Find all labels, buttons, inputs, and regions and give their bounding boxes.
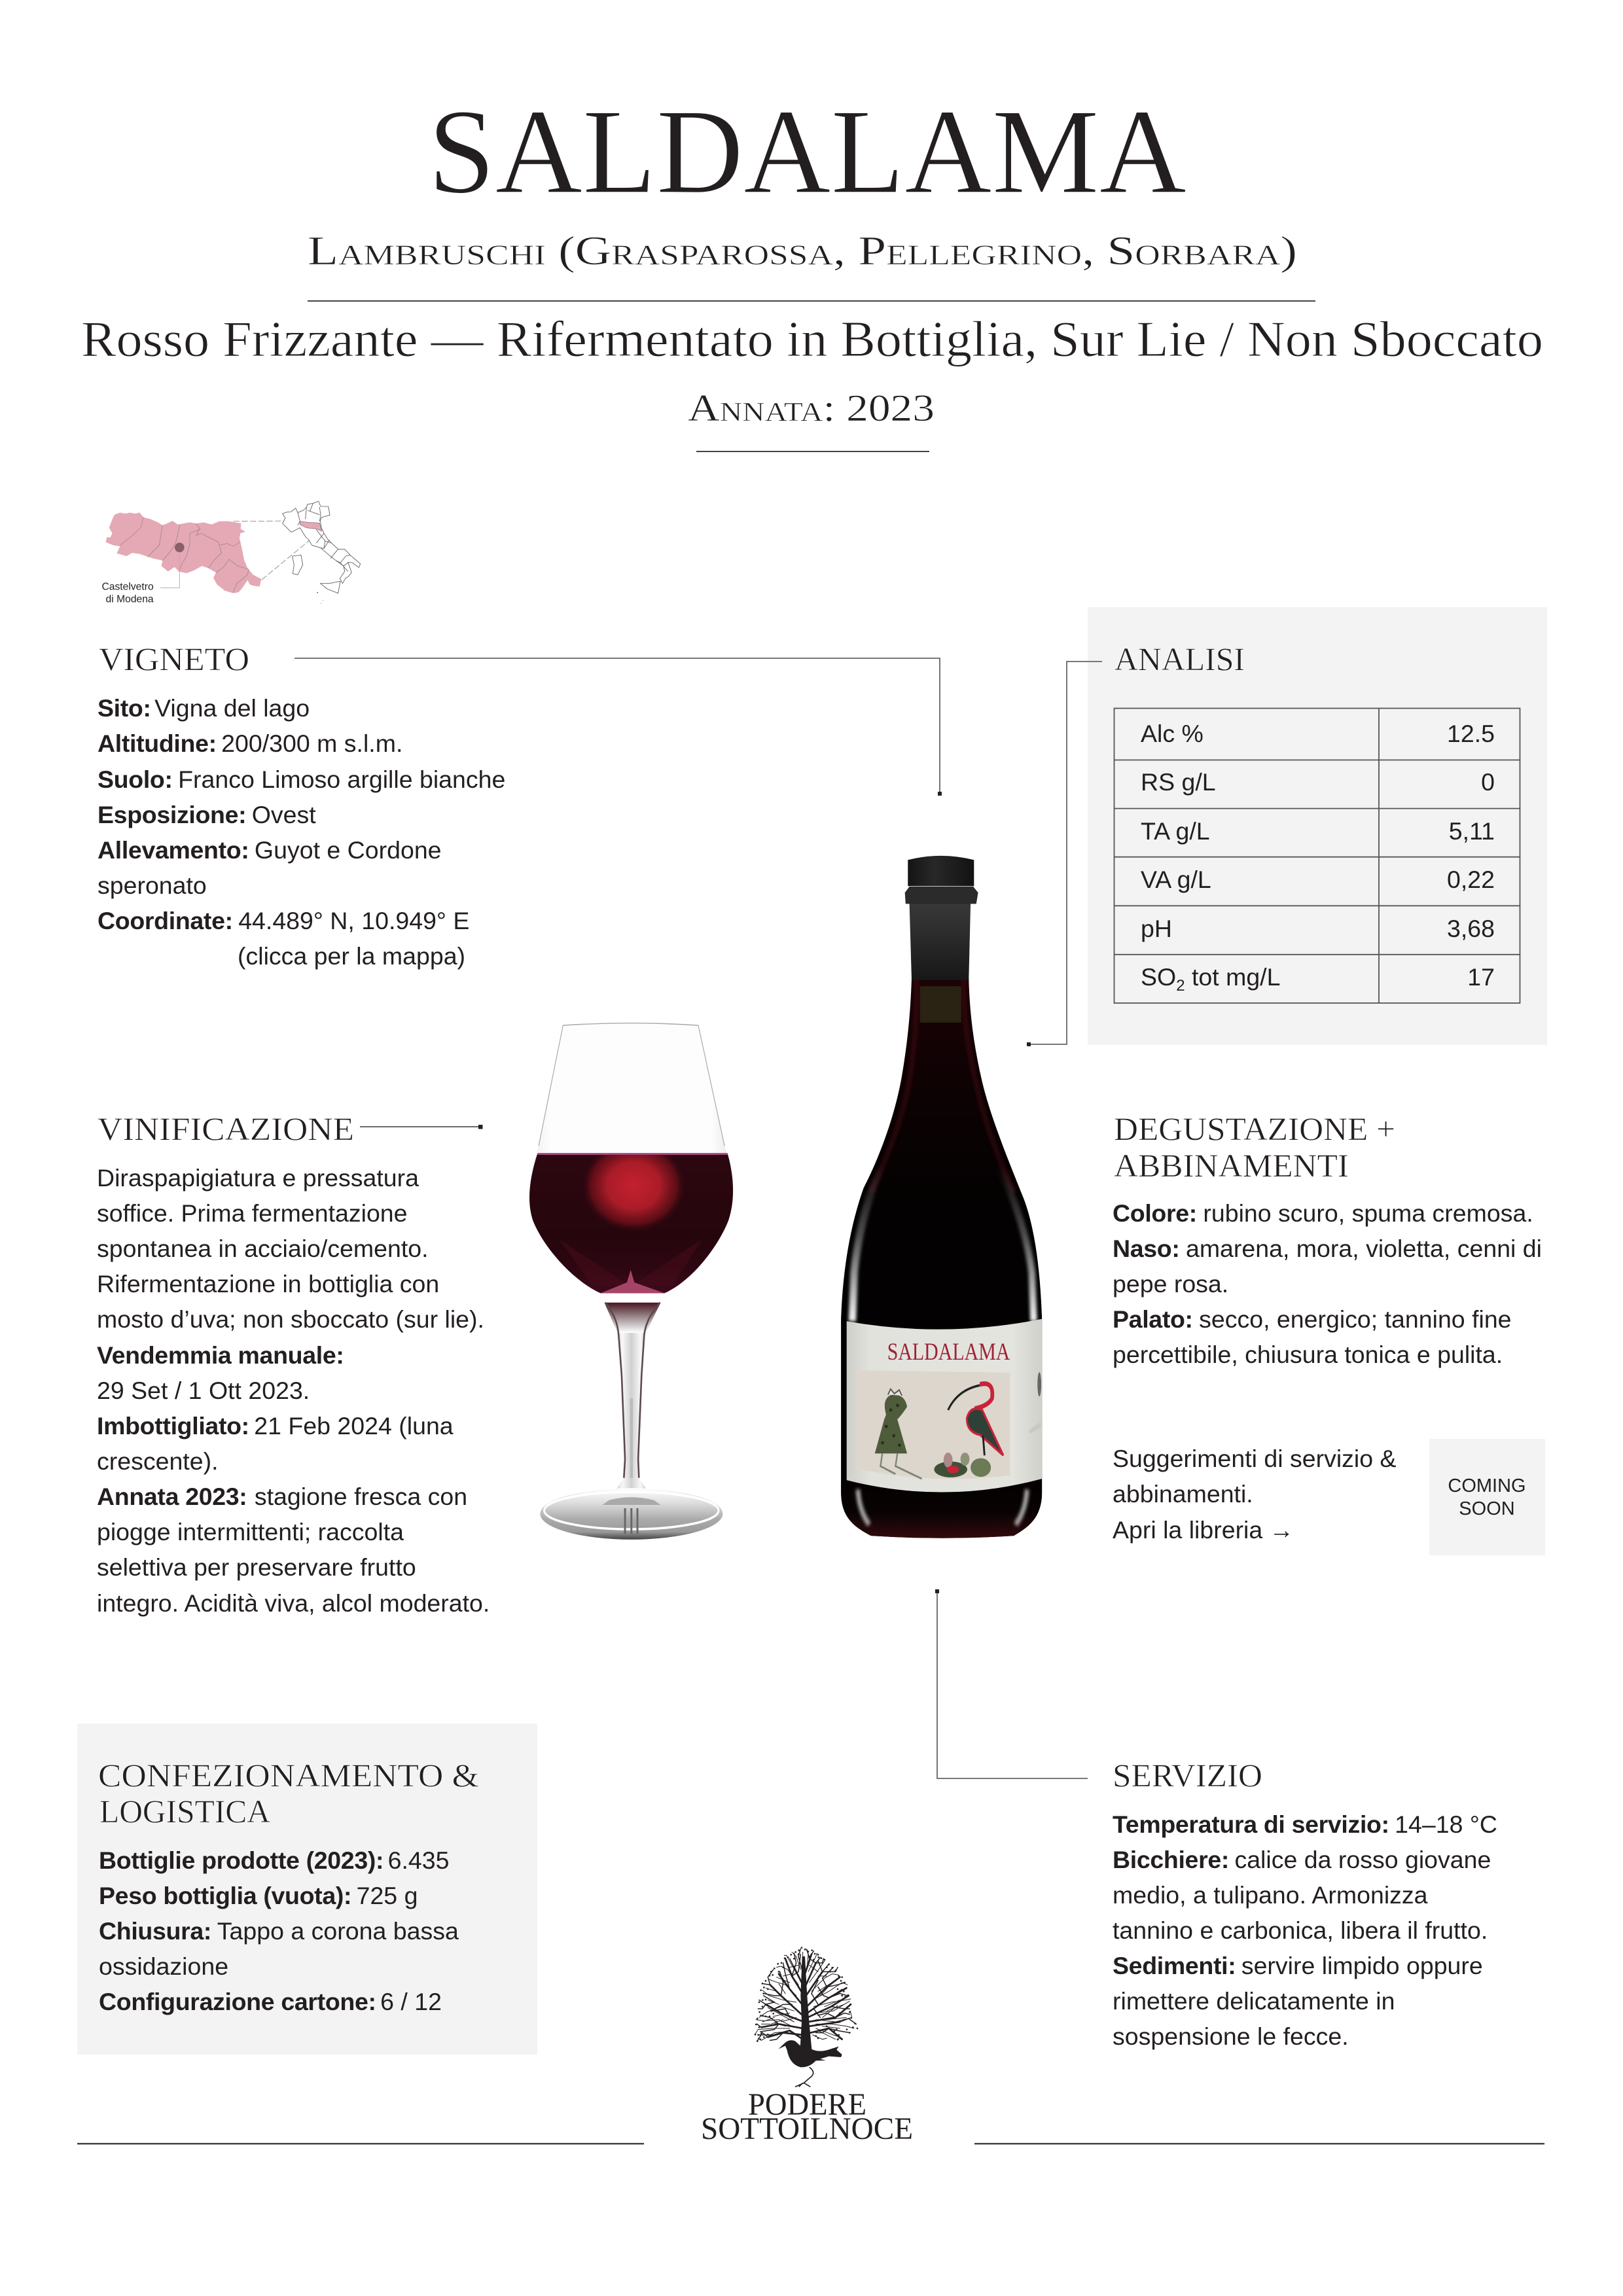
panel: degustazione e abbinamenti (1113, 1110, 1545, 1555)
wine glass illustration (529, 1023, 733, 1540)
capsule (910, 903, 971, 980)
packaging details: Peso bottiglia (vuota): 725 g (99, 1882, 418, 1909)
service details (1113, 1810, 1497, 2050)
bottle label: SALDALAMA (887, 1339, 1010, 1366)
analysis table: 17 (1467, 963, 1495, 991)
icon: bird (778, 2040, 842, 2067)
subtitle: grape varieties: Lambruschi (Grasparossa, Pellegrino, Sorbara) (308, 229, 1297, 274)
heading: ANALISI (1115, 641, 1245, 677)
tasting notes: Naso: amarena, mora, violetta, cenni di (1113, 1235, 1542, 1262)
heading: SERVIZIO (1113, 1757, 1262, 1793)
icon: tree and bird (755, 1948, 857, 2087)
tasting notes: pepe rosa. (1113, 1270, 1228, 1298)
analysis table: TA g/L (1141, 817, 1210, 845)
heading: VINIFICAZIONE (98, 1110, 354, 1147)
service details: Temperatura di servizio: 14–18 °C (1113, 1810, 1497, 1838)
packaging details: Bottiglie prodotte (2023): 6.435 (99, 1846, 449, 1874)
ibis figure (934, 1384, 1003, 1477)
vintage: Annata: 2023 (688, 387, 935, 429)
arrow: vigneto to bottle (294, 658, 942, 796)
logo: Podere Sottoilnoce (701, 1948, 913, 2146)
vineyard details text: speronato (98, 872, 207, 899)
winemaking text: soffice. Prima fermentazione (97, 1199, 408, 1227)
heading: CONFEZIONAMENTO & (98, 1757, 479, 1793)
Italy outline (283, 501, 361, 604)
winemaking text: integro. Acidità viva, alcol moderato. (97, 1589, 490, 1617)
heading: DEGUSTAZIONE + (1114, 1110, 1395, 1147)
vineyard details text (98, 694, 505, 970)
analysis table: RS g/L (1141, 768, 1216, 796)
packaging details: Configurazione cartone: 6 / 12 (99, 1988, 442, 2015)
winemaking text: piogge intermittenti; raccolta (97, 1518, 404, 1545)
service details: rimettere delicatamente in (1113, 1987, 1395, 2015)
tasting notes: Palato: secco, energico; tannino fine (1113, 1305, 1512, 1333)
packaging details: Chiusura: Tappo a corona bassa (99, 1917, 459, 1945)
tasting notes: Colore: rubino scuro, spuma cremosa. (1113, 1199, 1533, 1227)
pairing link text (1113, 1445, 1397, 1544)
logo wordmark (701, 2087, 913, 2146)
analysis table: 3,68 (1447, 915, 1495, 942)
tasting notes: percettibile, chiusura tonica e pulita. (1113, 1341, 1503, 1368)
title: SALDALAMA (428, 84, 1186, 219)
analysis table: tot mg/L (1185, 963, 1280, 991)
winemaking text: Annata 2023: stagione fresca con (97, 1483, 467, 1510)
logo wordmark: PODERE (748, 2087, 866, 2122)
arrow: vinificazione to glass (360, 1125, 483, 1129)
frog figure (875, 1389, 922, 1479)
heading: LOGISTICA (99, 1793, 270, 1829)
winemaking text: Diraspapigiatura e pressatura (97, 1164, 419, 1192)
packaging details: ossidazione (99, 1952, 228, 1980)
vineyard details text: Altitudine: 200/300 m s.l.m. (98, 730, 402, 757)
map label: di Modena (106, 594, 154, 605)
map label (101, 582, 154, 605)
analysis table: pH (1141, 915, 1172, 942)
service details: medio, a tulipano. Armonizza (1113, 1881, 1428, 1909)
service details: tannino e carbonica, libera il frutto. (1113, 1916, 1488, 1944)
map: Emilia-Romagna and Italy locator (101, 501, 361, 605)
pairing link text: abbinamenti. (1113, 1480, 1253, 1508)
bottle label (847, 1319, 1042, 1492)
panel: analisi (1088, 607, 1547, 1045)
heading: ABBINAMENTI (1114, 1147, 1349, 1184)
heading (98, 1757, 479, 1829)
vineyard details text: Suolo: Franco Limoso argille bianche (98, 766, 505, 793)
tasting notes (1113, 1199, 1542, 1368)
coming soon box (1429, 1439, 1545, 1555)
winemaking text: Vendemmia manuale: (97, 1341, 344, 1369)
winemaking text: crescente). (97, 1447, 219, 1475)
pairing link text: Suggerimenti di servizio & (1113, 1445, 1397, 1472)
analysis table: 5,11 (1449, 817, 1495, 845)
analysis table: 12.5 (1447, 720, 1495, 747)
pairing link text: Apri la libreria → (1113, 1516, 1294, 1544)
vineyard details text: Sito: Vigna del lago (98, 694, 310, 722)
winemaking text: 29 Set / 1 Ott 2023. (97, 1377, 310, 1404)
service details: Sedimenti: servire limpido oppure (1113, 1952, 1483, 1979)
bottle body (841, 978, 1042, 1538)
coming soon box: COMING (1448, 1475, 1526, 1496)
wine style line: Rosso Frizzante — Rifermentato in Bottiglia, Sur Lie / Non Sboccato (81, 311, 1543, 367)
vineyard details text: Coordinate: 44.489° N, 10.949° E (98, 907, 469, 934)
winemaking text: spontanea in acciaio/cemento. (97, 1235, 429, 1262)
region Emilia-Romagna (106, 512, 261, 593)
analysis table: 0 (1481, 768, 1495, 796)
heading: VIGNETO (99, 641, 249, 677)
bottle illustration (841, 856, 1042, 1544)
winemaking text: Imbottigliato: 21 Feb 2024 (luna (97, 1412, 454, 1439)
arrow: bottle to servizio (935, 1589, 1088, 1778)
vineyard details text: Esposizione: Ovest (98, 801, 316, 828)
vineyard details text: Allevamento: Guyot e Cordone (98, 836, 442, 864)
winemaking text: mosto d’uva; non sboccato (sur lie). (97, 1305, 484, 1333)
arrow: analisi to bottle (1027, 662, 1102, 1046)
winemaking text: Rifermentazione in bottiglia con (97, 1270, 439, 1298)
analysis table: Alc % (1141, 720, 1204, 747)
analysis table: 2 (1176, 977, 1185, 995)
packaging details (99, 1846, 459, 2015)
analysis table: SO (1141, 963, 1176, 991)
analysis table: VA g/L (1141, 866, 1211, 893)
map label: Castelvetro (101, 582, 154, 593)
vineyard details text: (clicca per la mappa) (238, 942, 465, 970)
heading (1114, 1110, 1395, 1184)
panel: vigneto (98, 641, 505, 970)
winemaking text (97, 1164, 490, 1617)
logo wordmark: SOTTOILNOCE (701, 2111, 913, 2146)
panel: confezionamento e logistica (77, 1723, 537, 2055)
coming soon box: SOON (1459, 1498, 1515, 1519)
panel: servizio (1113, 1757, 1497, 2050)
analysis table: 0,22 (1447, 866, 1495, 893)
service details: sospensione le fecce. (1113, 2022, 1349, 2050)
winemaking text: selettiva per preservare frutto (97, 1553, 416, 1581)
service details: Bicchiere: calice da rosso giovane (1113, 1846, 1491, 1873)
analysis table (1114, 708, 1520, 1003)
panel: vinificazione (97, 1110, 490, 1617)
